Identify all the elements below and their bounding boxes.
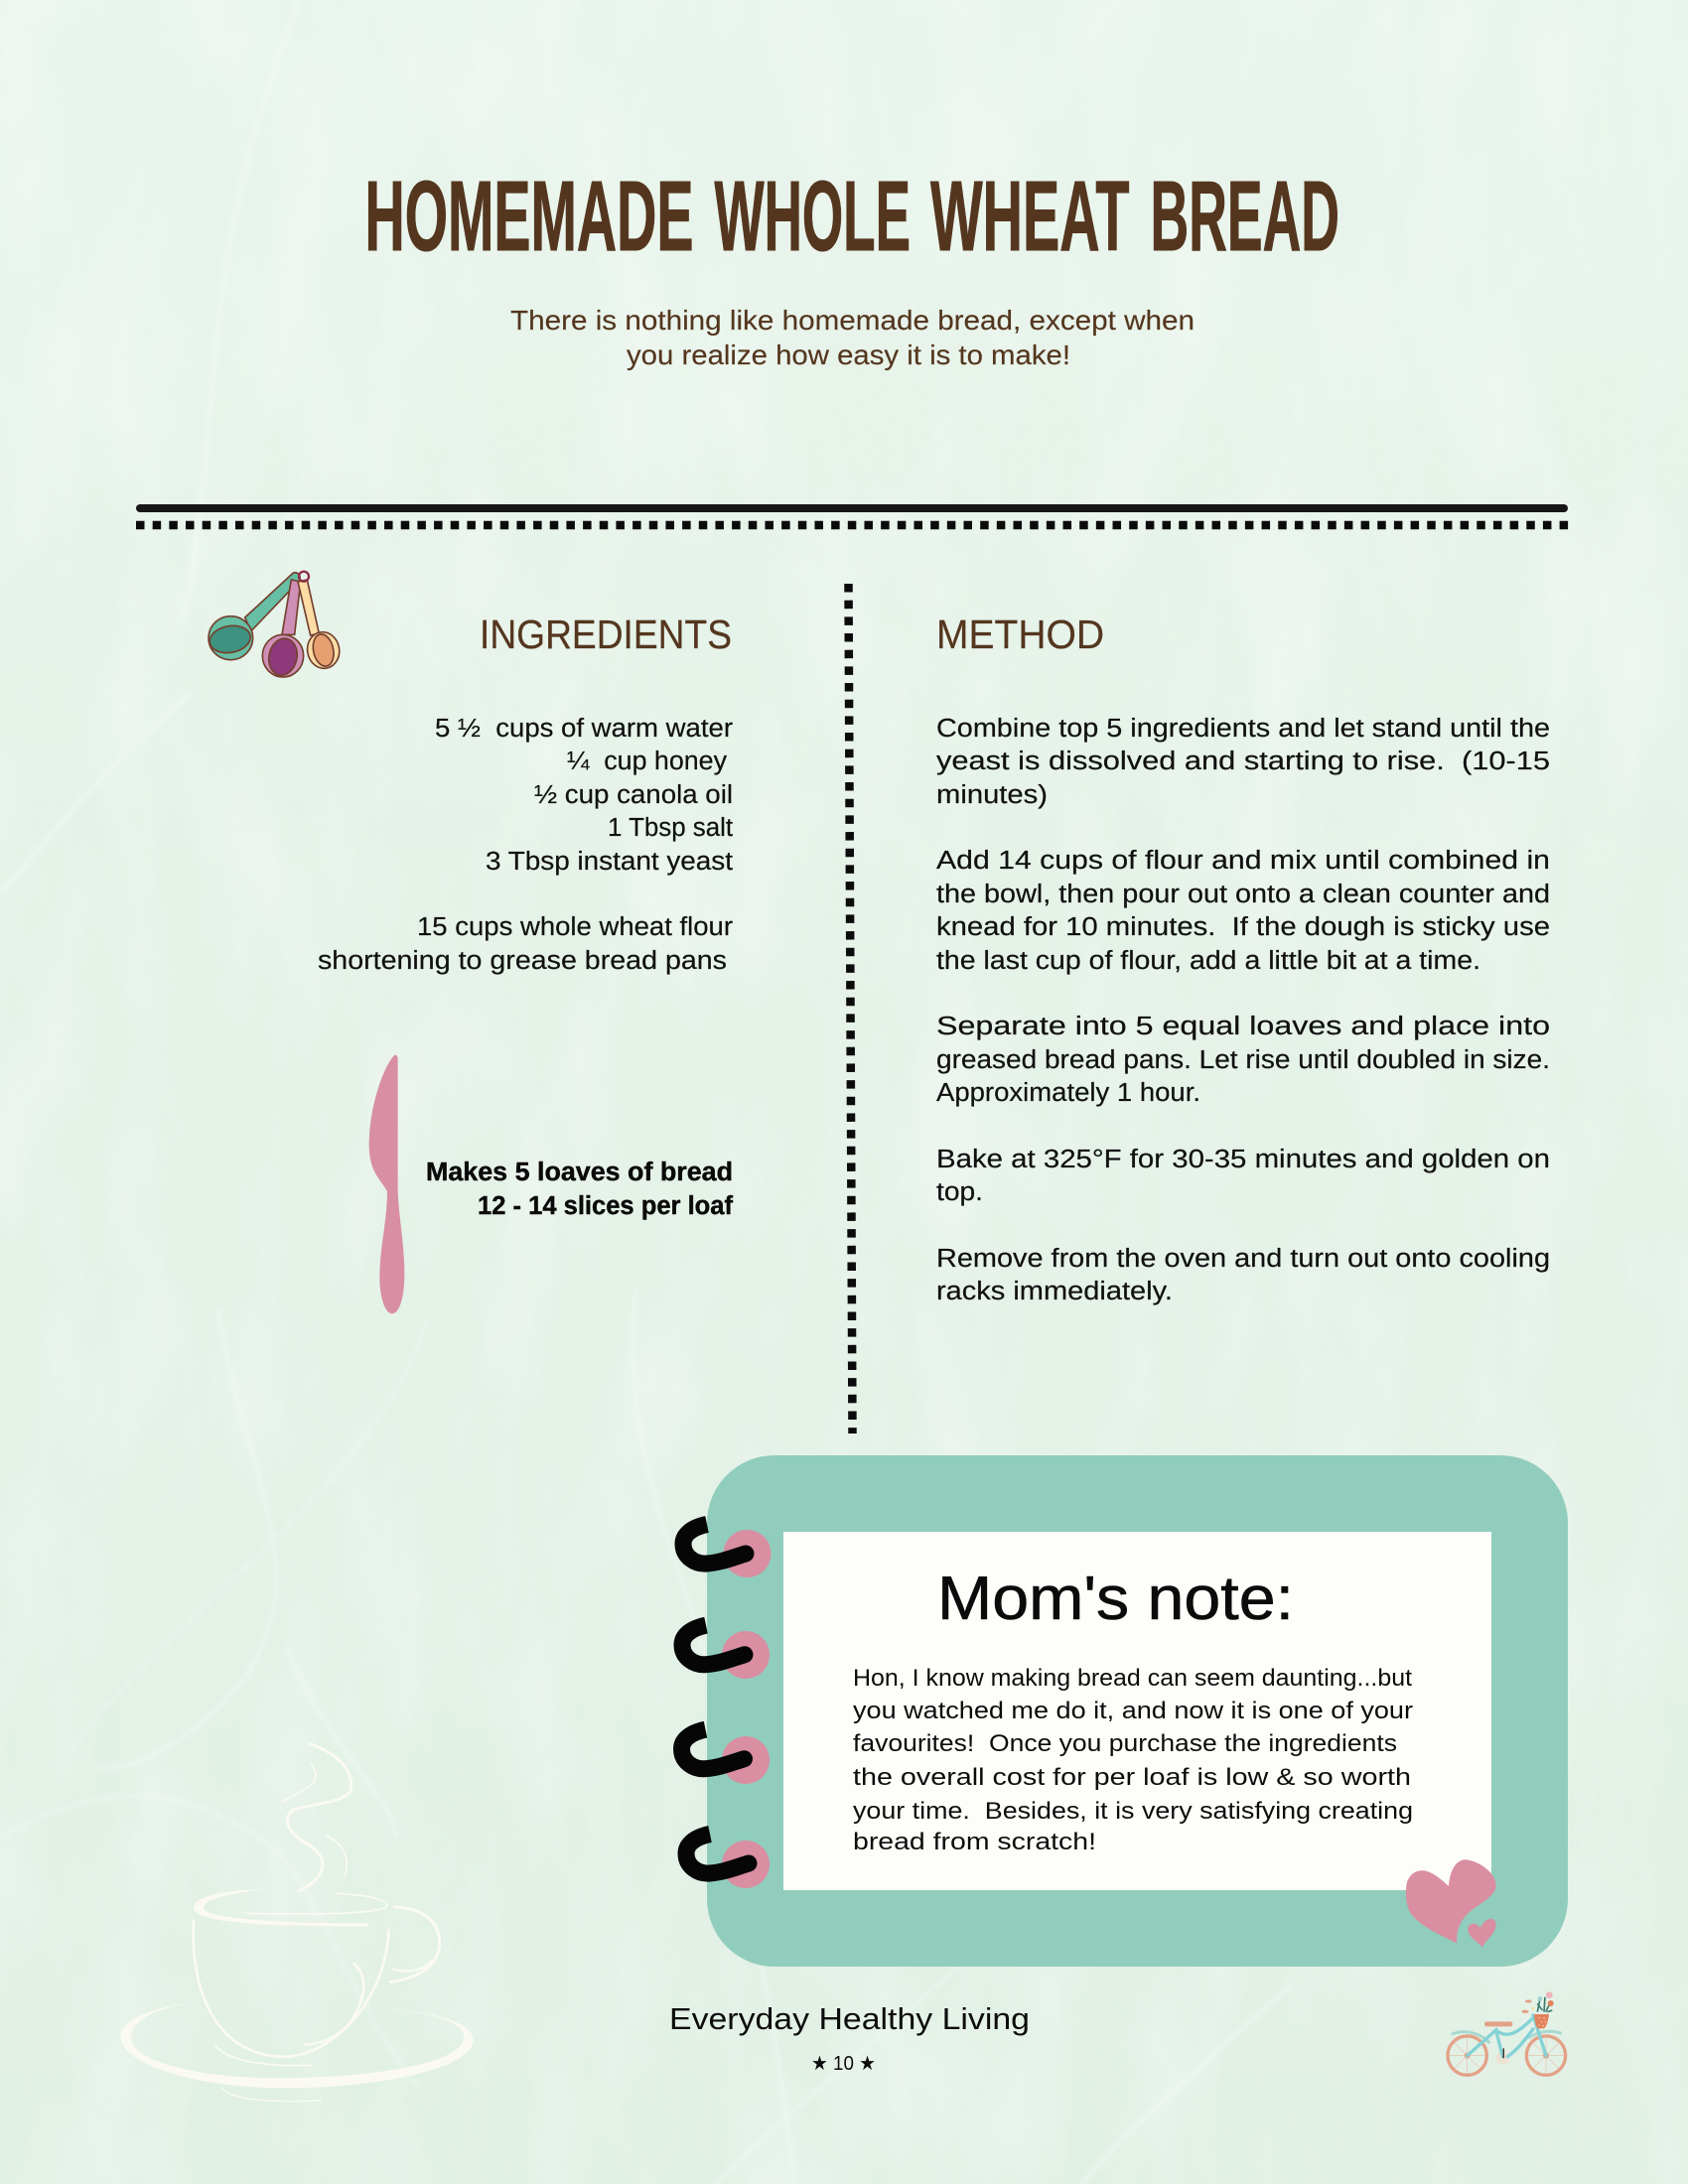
note body: the overall cost for per loaf is low & so worth — [853, 1764, 1411, 1791]
yield note: 12 - 14 slices per loaf — [478, 1192, 734, 1220]
ingredients list: 5 ½ cups of warm water — [435, 715, 734, 743]
subtitle: you realize how easy it is to make! — [627, 340, 1070, 370]
method steps: knead for 10 minutes. If the dough is sticky use — [936, 913, 1550, 941]
subtitle: There is nothing like homemade bread, except when — [510, 305, 1195, 336]
ingredients list: 1 Tbsp salt — [608, 814, 733, 842]
ingredients list — [318, 715, 734, 975]
heading: ingredients: INGREDIENTS — [480, 612, 732, 657]
spiral binding — [681, 1525, 749, 1873]
panel: ingredients — [208, 572, 734, 1313]
method steps: Remove from the oven and turn out onto cooling — [936, 1245, 1550, 1273]
icon: knife — [369, 1055, 404, 1313]
method steps: the last cup of flour, add a little bit at a time. — [936, 947, 1480, 975]
note body: bread from scratch! — [853, 1829, 1096, 1855]
method steps: the bowl, then pour out onto a clean counter and — [936, 881, 1550, 908]
icon: measuring spoons — [208, 572, 343, 678]
method steps: racks immediately. — [936, 1278, 1173, 1305]
note heading: Mom's note: — [937, 1565, 1294, 1633]
panel: method — [936, 612, 1550, 1305]
ingredients list: ¼ cup honey — [567, 748, 727, 775]
method steps: Combine top 5 ingredients and let stand until the — [936, 715, 1550, 743]
subtitle — [510, 305, 1195, 370]
method steps: Approximately 1 hour. — [936, 1079, 1200, 1107]
yield note — [426, 1159, 734, 1220]
method steps: yeast is dissolved and starting to rise. (10-15 — [936, 748, 1550, 775]
note body: you watched me do it, and now it is one of your — [853, 1698, 1413, 1724]
yield note: Makes 5 loaves of bread — [426, 1159, 733, 1186]
method steps: minutes) — [936, 781, 1048, 809]
title — [365, 161, 1339, 272]
method steps: Separate into 5 equal loaves and place into — [936, 1013, 1550, 1040]
note body: your time. Besides, it is very satisfying creating — [853, 1798, 1413, 1825]
note paper — [783, 1532, 1491, 1890]
footer: page number: ★ 10 ★ — [811, 2053, 876, 2075]
note body — [853, 1665, 1413, 1855]
title: BREAD — [1150, 161, 1339, 272]
method steps: Bake at 325°F for 30-35 minutes and golden on — [936, 1146, 1550, 1173]
icon: hearts — [1406, 1859, 1496, 1947]
icon: bicycle — [1448, 1991, 1566, 2075]
title: WHEAT — [930, 161, 1130, 272]
ingredients list: 3 Tbsp instant yeast — [486, 848, 733, 876]
ingredients list: ½ cup canola oil — [534, 781, 733, 809]
heading: method: METHOD — [936, 612, 1104, 657]
method steps: Add 14 cups of flour and mix until combined in — [936, 847, 1550, 875]
notebook cover — [707, 1455, 1568, 1967]
ingredients list: shortening to grease bread pans — [318, 947, 727, 975]
icon: coffee cup watermark — [121, 1744, 474, 2102]
title: WHOLE — [715, 161, 911, 272]
method steps — [936, 715, 1550, 1305]
method steps: greased bread pans. Let rise until doubled in size. — [936, 1046, 1550, 1074]
ingredients list: 15 cups whole wheat flour — [417, 913, 734, 941]
notebook holes — [722, 1530, 771, 1888]
note body: favourites! Once you purchase the ingredients — [853, 1730, 1397, 1757]
title: HOMEMADE — [365, 161, 693, 272]
note body: Hon, I know making bread can seem daunting...but — [853, 1665, 1412, 1692]
footer: publication name: Everyday Healthy Living — [669, 2001, 1030, 2036]
panel: mom's note notebook — [681, 1455, 1568, 1967]
method steps: top. — [936, 1178, 983, 1206]
